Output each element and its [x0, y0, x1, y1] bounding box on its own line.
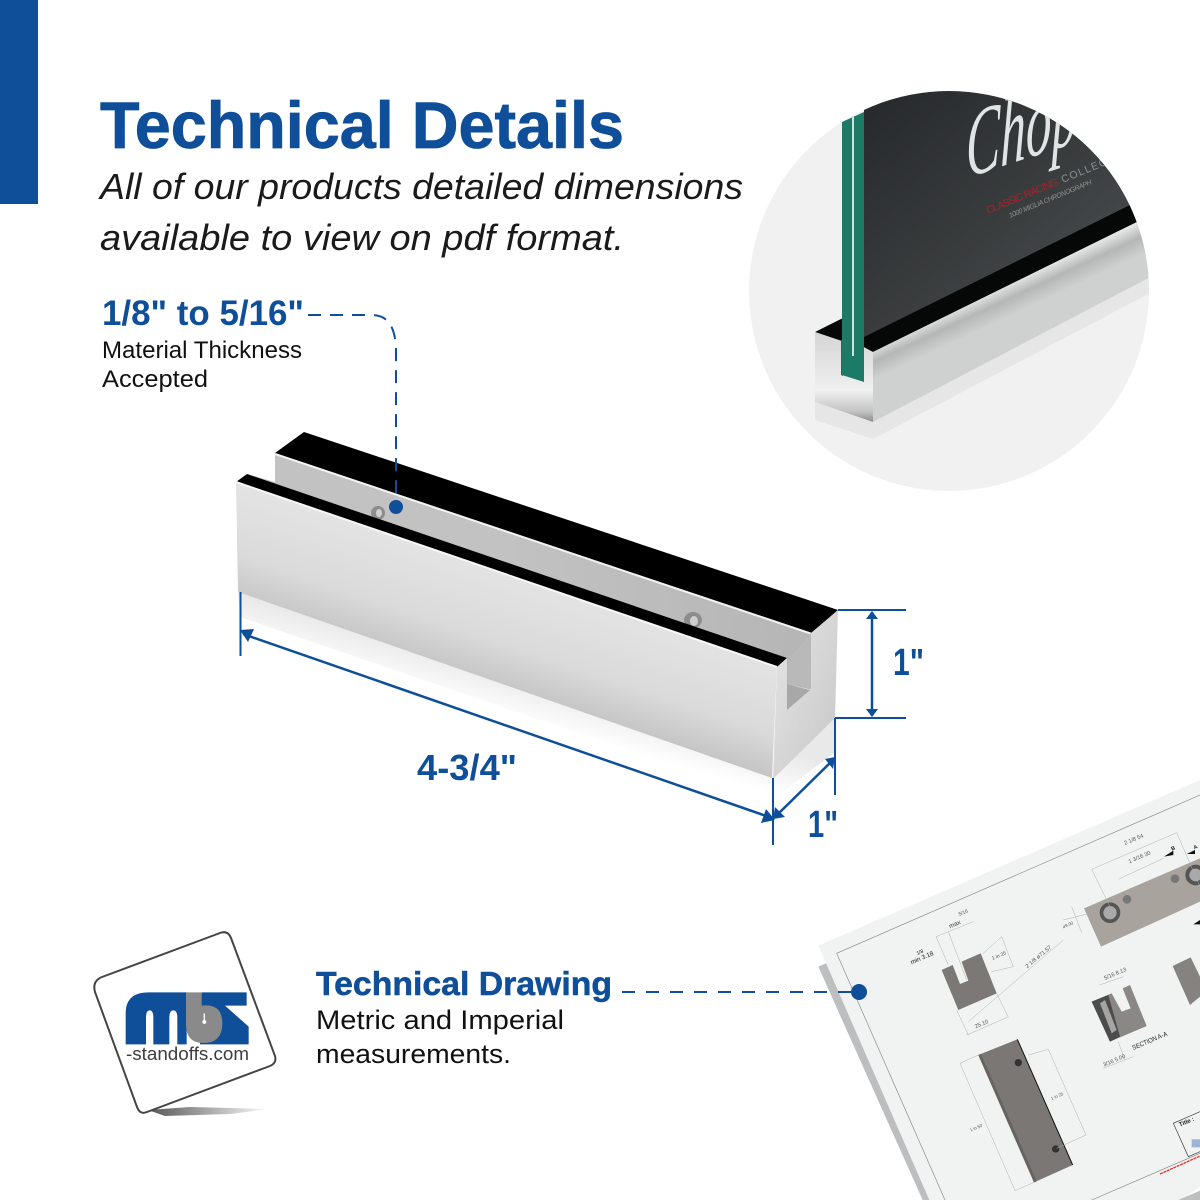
brand lettering	[968, 99, 1105, 218]
dimension labels: 1 in 25	[991, 950, 1007, 962]
label: depth: 1"	[808, 804, 838, 846]
floor reflection	[238, 592, 834, 800]
slot shadow	[841, 340, 843, 376]
section markers	[1164, 844, 1200, 924]
panel: technical drawing sheet	[818, 780, 1200, 1200]
logo card	[94, 932, 275, 1116]
dimension: length	[240, 592, 775, 845]
leader line: thickness	[308, 315, 396, 500]
dimension labels: 25.10	[974, 1019, 989, 1030]
black gasket strip	[815, 205, 1137, 352]
callout: material thickness: 1/8" to 5/16"	[102, 294, 304, 333]
glass highlight	[852, 116, 854, 356]
logo wordmark: -standoffs.com	[126, 1043, 249, 1064]
callout: technical drawing	[316, 965, 612, 1069]
sheet border	[837, 795, 1200, 1200]
dimension labels: 1 in 25	[1050, 1091, 1065, 1101]
label: height: 1"	[893, 642, 924, 684]
dimension labels	[910, 833, 1152, 1133]
callout: material thickness: Material Thickness	[102, 337, 302, 364]
dimension labels: max	[948, 919, 963, 930]
leader line: drawing	[622, 991, 852, 993]
dark printed panel	[864, 91, 1130, 337]
dimension: depth	[773, 718, 835, 819]
green glass edge	[842, 112, 864, 382]
dimension labels: 2 1/8 54	[1123, 833, 1145, 847]
section markers: B	[1170, 845, 1176, 853]
dimension labels: min 3.18	[910, 950, 935, 966]
sheet paper	[818, 780, 1200, 1200]
logo shadow	[148, 1107, 270, 1116]
callout: technical drawing: Metric and Imperial	[316, 1005, 564, 1035]
section markers: A	[1193, 844, 1199, 851]
panel: product photo circle	[749, 91, 1149, 491]
end face	[773, 610, 838, 779]
drawing: partial section	[1173, 957, 1200, 1005]
title block: Title :	[1178, 1117, 1195, 1129]
section caption: SECTION A-A	[1131, 1031, 1169, 1052]
dimension labels: ø9.00	[1062, 920, 1074, 929]
screw right	[684, 612, 702, 628]
brand lettering: COLLECTION	[1060, 144, 1137, 186]
silver base long side	[873, 214, 1160, 422]
panel: product illustration	[236, 432, 838, 800]
dimension labels: 1 3/16 30	[1128, 850, 1152, 865]
brand lettering: CLASSIC RACING	[985, 176, 1060, 217]
inner wall	[247, 453, 812, 690]
base shadow	[815, 277, 1150, 439]
drawing: top view	[1084, 858, 1200, 947]
logo mark	[126, 992, 249, 1044]
dimension labels: 3/16 5.00	[1102, 1054, 1126, 1069]
dimension: height	[835, 610, 906, 718]
callout: material thickness	[102, 294, 304, 393]
brand lettering: 1000 MIGLIA CHRONOGRAPH	[1008, 179, 1094, 220]
front face	[236, 482, 777, 778]
subtitle	[98, 166, 743, 258]
drawing: section A-A	[1092, 985, 1147, 1042]
title block	[1160, 1112, 1200, 1174]
title: Technical Details	[100, 88, 624, 162]
label: length: 4-3/4"	[417, 747, 517, 788]
dimension labels: 5/16	[958, 908, 969, 918]
dimension labels: 2 1/8 ø71.57	[1025, 945, 1053, 970]
dimension labels: 5/16 8.13	[1103, 967, 1127, 982]
drawing: flat view	[978, 1039, 1073, 1182]
drawing: end profile	[942, 953, 997, 1010]
subtitle: available to view on pdf format.	[100, 217, 624, 258]
screw left	[371, 506, 385, 520]
callout: material thickness: Accepted	[102, 366, 208, 393]
back wall top	[275, 432, 838, 633]
sheet shadow	[818, 962, 950, 1200]
leader dot: drawing	[851, 984, 867, 1000]
callout: technical drawing: Technical Drawing	[316, 965, 612, 1002]
subtitle: All of our products detailed dimensions	[98, 166, 743, 207]
callout: technical drawing: measurements.	[316, 1039, 511, 1069]
silver base end face	[815, 332, 873, 422]
dimension labels: 1/8	[916, 949, 925, 957]
slot interior	[788, 633, 811, 688]
dimension labels: 1 in 50	[969, 1123, 984, 1133]
dimension lines	[936, 833, 1200, 1191]
leader dot	[389, 500, 403, 514]
blue corner bar	[0, 0, 38, 204]
front plate top	[236, 474, 787, 667]
